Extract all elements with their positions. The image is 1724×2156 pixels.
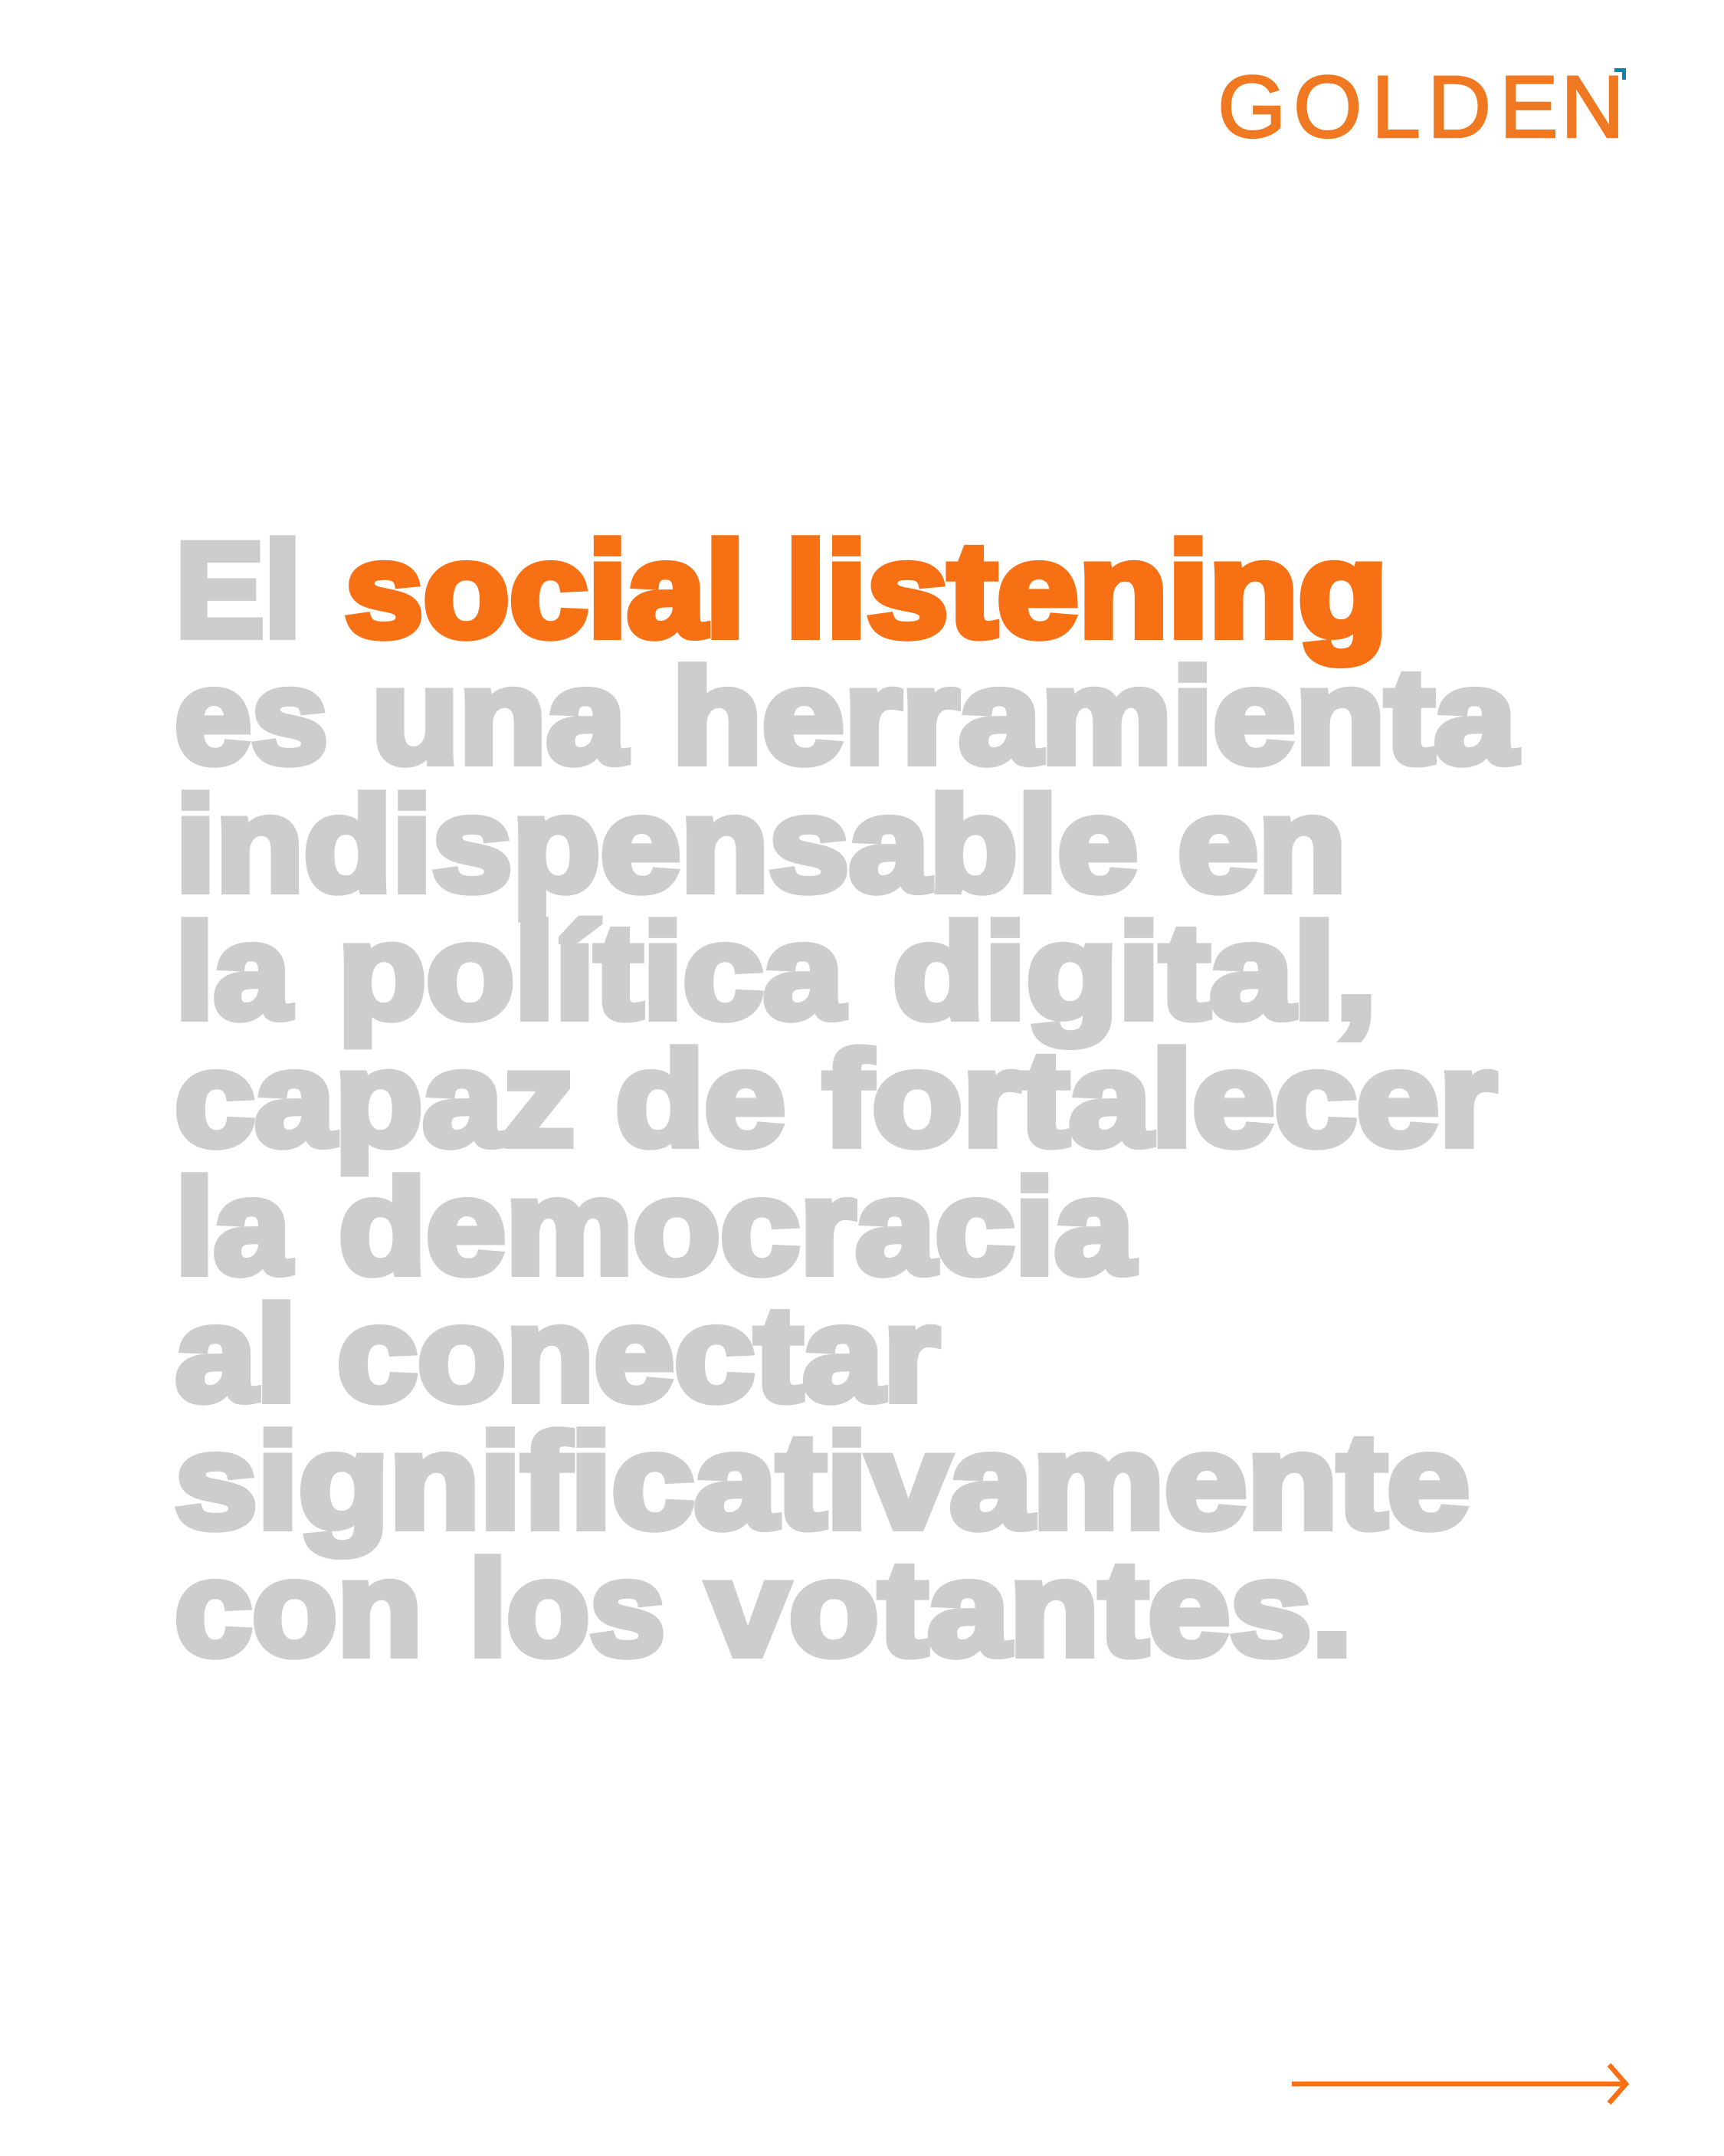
main statement heading <box>175 516 1518 1684</box>
highlighted phrase: social listening: listening <box>785 516 1388 665</box>
highlighted phrase: social listening <box>345 516 1388 665</box>
arrow: next page <box>1292 2065 1626 2103</box>
line 2 <box>175 642 1518 792</box>
line 5 <box>175 1025 1496 1174</box>
line 6: democracia <box>339 1153 1136 1302</box>
logo: GOLDEN <box>1218 58 1626 156</box>
logo teal corner mark <box>1614 68 1626 80</box>
logo wordmark: GOLDEN <box>1218 58 1624 156</box>
line 7: al <box>175 1280 297 1429</box>
line 9: con <box>175 1534 422 1684</box>
line 2: una <box>372 642 628 792</box>
line 9: votantes. <box>707 1534 1352 1684</box>
line 4: la <box>175 898 292 1047</box>
line 5: fortalecer <box>823 1025 1496 1174</box>
line 4 <box>175 898 1377 1047</box>
line 8: significativamente <box>175 1407 1470 1557</box>
highlighted phrase: social listening: social <box>345 516 745 665</box>
line 4: digital, <box>893 898 1377 1047</box>
line 5: capaz <box>175 1025 575 1174</box>
line 9 <box>175 1534 1352 1684</box>
line 5: de <box>615 1025 785 1174</box>
line 2: es <box>175 642 328 792</box>
line 1: El <box>175 516 301 665</box>
line 9: los <box>469 1534 665 1684</box>
line 2: herramienta <box>672 642 1518 792</box>
line 6: la <box>175 1153 292 1302</box>
line 3: indispensable <box>175 770 1138 920</box>
line 7: conectar <box>337 1280 939 1429</box>
line 3: en <box>1178 770 1346 920</box>
line 4: política <box>338 898 845 1047</box>
line 1 <box>175 516 1388 665</box>
